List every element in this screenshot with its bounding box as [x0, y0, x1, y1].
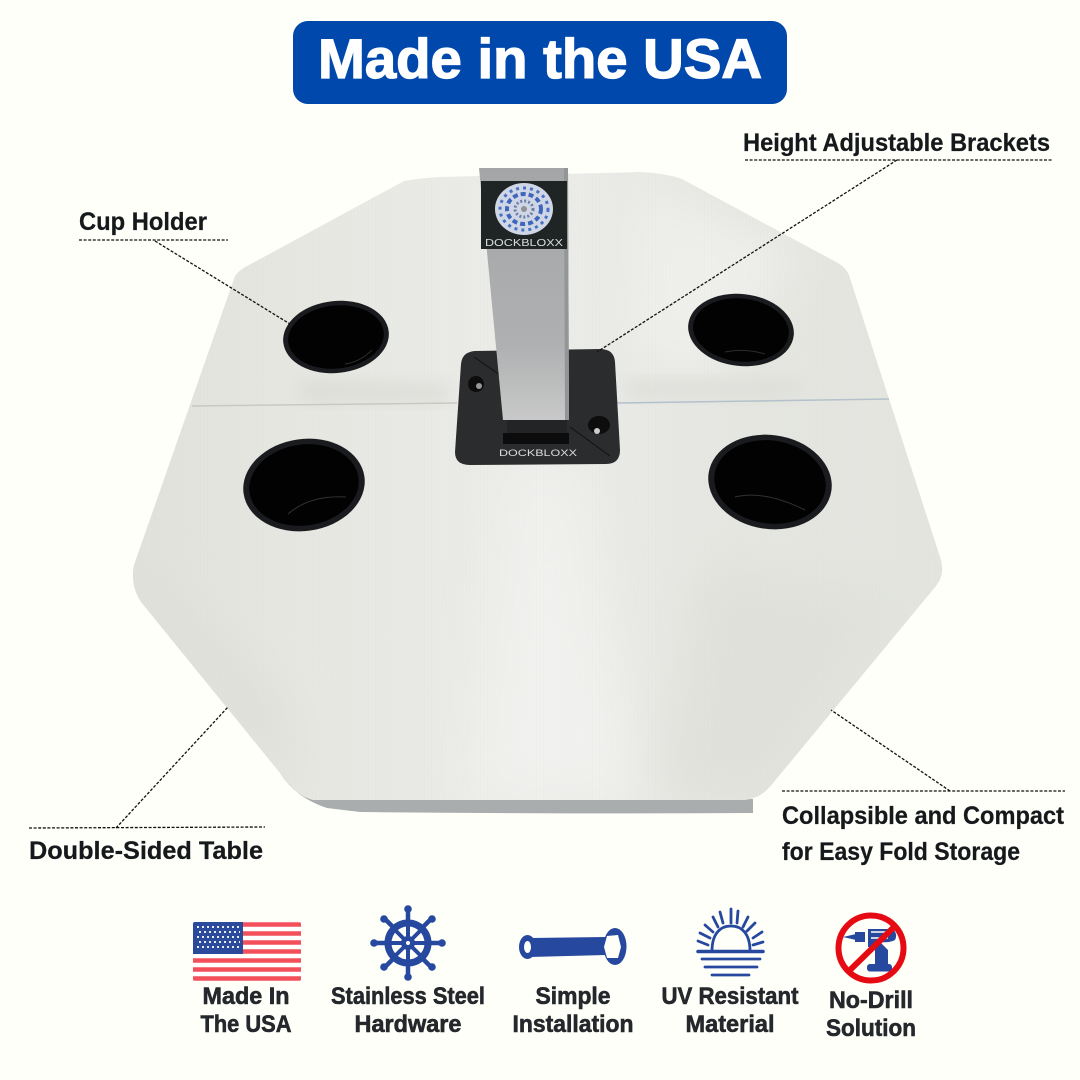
QR code sticker — [495, 183, 553, 235]
icon: wrench — [519, 928, 626, 965]
icon label: made in the usa — [200, 983, 292, 1038]
bracket post: DOCKBLOXX — [499, 448, 578, 459]
bracket post: DOCKBLOXX — [485, 238, 563, 249]
bracket base plate — [455, 349, 620, 465]
title: Made in the USA — [318, 27, 762, 90]
icon label: made in the usa: Made In — [202, 983, 290, 1010]
table photo — [120, 160, 960, 820]
cup holder: back right — [685, 289, 797, 371]
cup holder: front right — [702, 427, 838, 537]
icon label: uv resistant material — [662, 983, 798, 1038]
icon label: stainless steel hardware: Stainless Steel — [331, 983, 485, 1010]
icon label: uv resistant material: Material — [686, 1011, 774, 1038]
callout: cup holder: Cup Holder — [79, 208, 207, 236]
callout: height adjustable brackets: Height Adjustable Brackets — [743, 129, 1050, 157]
icon label: stainless steel hardware — [331, 983, 485, 1038]
icon: US flag — [193, 922, 301, 981]
icon: no drill — [838, 916, 904, 980]
icon label: simple installation: Simple — [536, 983, 610, 1010]
callout: cup holder — [79, 208, 290, 324]
icon label: stainless steel hardware: Hardware — [354, 1011, 462, 1038]
cup holder: front left — [237, 431, 371, 539]
icon label: no-drill solution — [826, 987, 916, 1042]
table underside edge — [280, 773, 753, 813]
icon: ship wheel — [370, 905, 446, 981]
callout: double-sided table — [29, 707, 265, 865]
callout: double-sided table: Double-Sided Table — [29, 837, 263, 865]
bracket post — [479, 168, 578, 459]
icon label: uv resistant material: UV Resistant — [662, 983, 798, 1010]
title — [293, 21, 787, 104]
icon label: no-drill solution: No-Drill — [829, 987, 913, 1014]
table shading — [120, 160, 960, 820]
callout: height adjustable brackets — [597, 129, 1052, 352]
callout: collapsible and compact — [782, 710, 1065, 866]
icon label: simple installation: Installation — [512, 1011, 634, 1038]
icon label: made in the usa: The USA — [200, 1011, 292, 1038]
icon label: no-drill solution: Solution — [826, 1015, 916, 1042]
callout: collapsible and compact: for Easy Fold Storage — [782, 838, 1020, 866]
icon label: simple installation — [512, 983, 634, 1038]
icon: sun over water — [698, 909, 763, 975]
callout: collapsible and compact: Collapsible and Compact — [782, 802, 1065, 830]
cup holder: back left — [280, 296, 392, 378]
table fold line — [192, 403, 457, 406]
table top — [133, 172, 942, 800]
